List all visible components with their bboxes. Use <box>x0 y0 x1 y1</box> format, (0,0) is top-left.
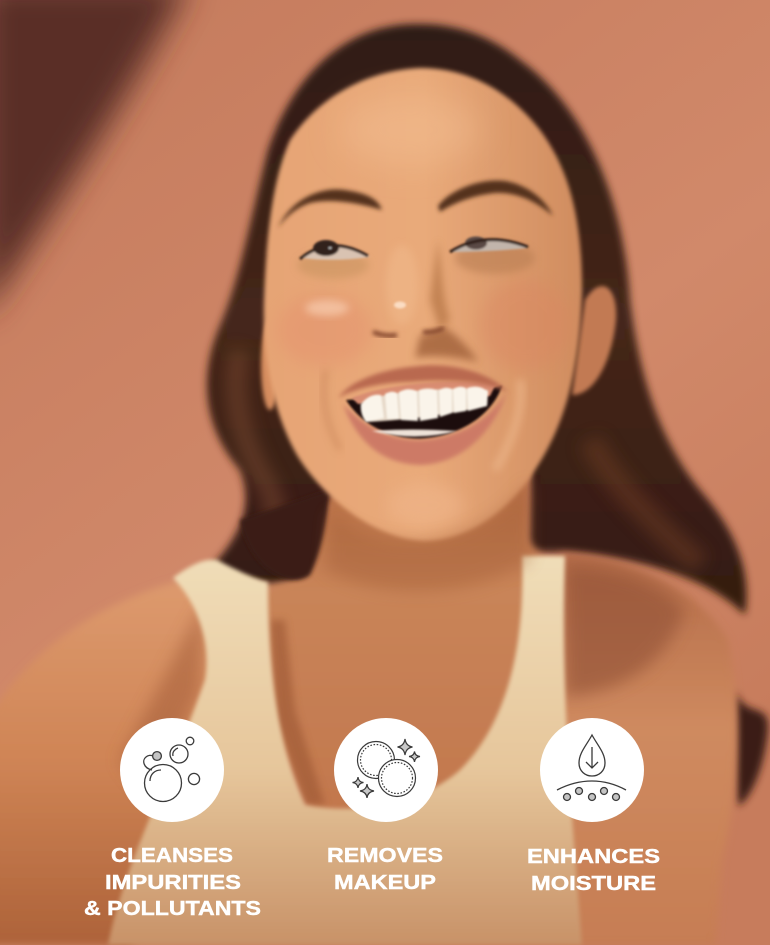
mouth interior <box>346 386 502 439</box>
forehead highlight <box>340 95 480 165</box>
label: enhances moisture: ENHANCES <box>527 845 660 868</box>
left shoulder and arm <box>0 578 290 945</box>
chin shadow on neck <box>325 480 530 591</box>
tank top <box>108 556 582 945</box>
right eye socket <box>455 242 535 274</box>
right shoulder and arm <box>560 553 737 945</box>
cheek highlight <box>305 300 349 316</box>
nose under shadow <box>415 328 478 362</box>
diagonal shadow on wall <box>0 0 190 320</box>
armpit shadow <box>120 600 205 800</box>
label: cleanses impurities and pollutants <box>84 844 261 920</box>
label: cleanses impurities and pollutants: IMPURITIES <box>105 871 241 894</box>
label: enhances moisture: MOISTURE <box>531 872 656 895</box>
label: enhances moisture <box>527 845 660 895</box>
label: cleanses impurities and pollutants: CLEANSES <box>111 844 233 867</box>
right ear <box>572 286 616 395</box>
benefit: cleanses impurities and pollutants <box>84 718 261 920</box>
nose side shadow <box>430 240 450 330</box>
smile crease left <box>324 370 340 450</box>
label: cleanses impurities and pollutants: & POLLUTANTS <box>84 897 261 920</box>
hair lock over neck <box>240 490 328 580</box>
back hair <box>207 24 768 806</box>
chin highlight <box>387 483 463 527</box>
icon: bubbles <box>120 718 224 822</box>
benefit: enhances moisture <box>527 718 660 895</box>
left eyebrow <box>278 189 382 228</box>
face <box>264 68 582 541</box>
nostrils <box>373 328 444 336</box>
upper gum <box>352 382 496 404</box>
cheek blush <box>277 294 373 366</box>
smile crease right <box>495 380 521 470</box>
hair highlights <box>236 350 700 565</box>
right eye <box>450 236 528 252</box>
right eyebrow <box>438 181 553 216</box>
left ear <box>261 320 279 410</box>
chest shadow along neckline <box>270 620 325 805</box>
left eye <box>300 240 370 260</box>
upper lip <box>338 365 508 398</box>
lower lip <box>343 392 507 465</box>
left eye socket <box>297 251 369 279</box>
icon: cotton pads and sparkles <box>334 718 438 822</box>
label: removes makeup <box>327 844 443 894</box>
shadow on right shoulder <box>565 565 685 697</box>
nose highlight <box>386 245 418 325</box>
label: removes makeup: MAKEUP <box>334 871 436 894</box>
icon: droplet absorbing into skin <box>540 718 644 822</box>
label: removes makeup: REMOVES <box>327 844 443 867</box>
upper teeth <box>361 387 488 422</box>
neck and chest <box>262 470 545 815</box>
benefit: removes makeup <box>327 718 443 894</box>
lower teeth <box>372 430 457 436</box>
